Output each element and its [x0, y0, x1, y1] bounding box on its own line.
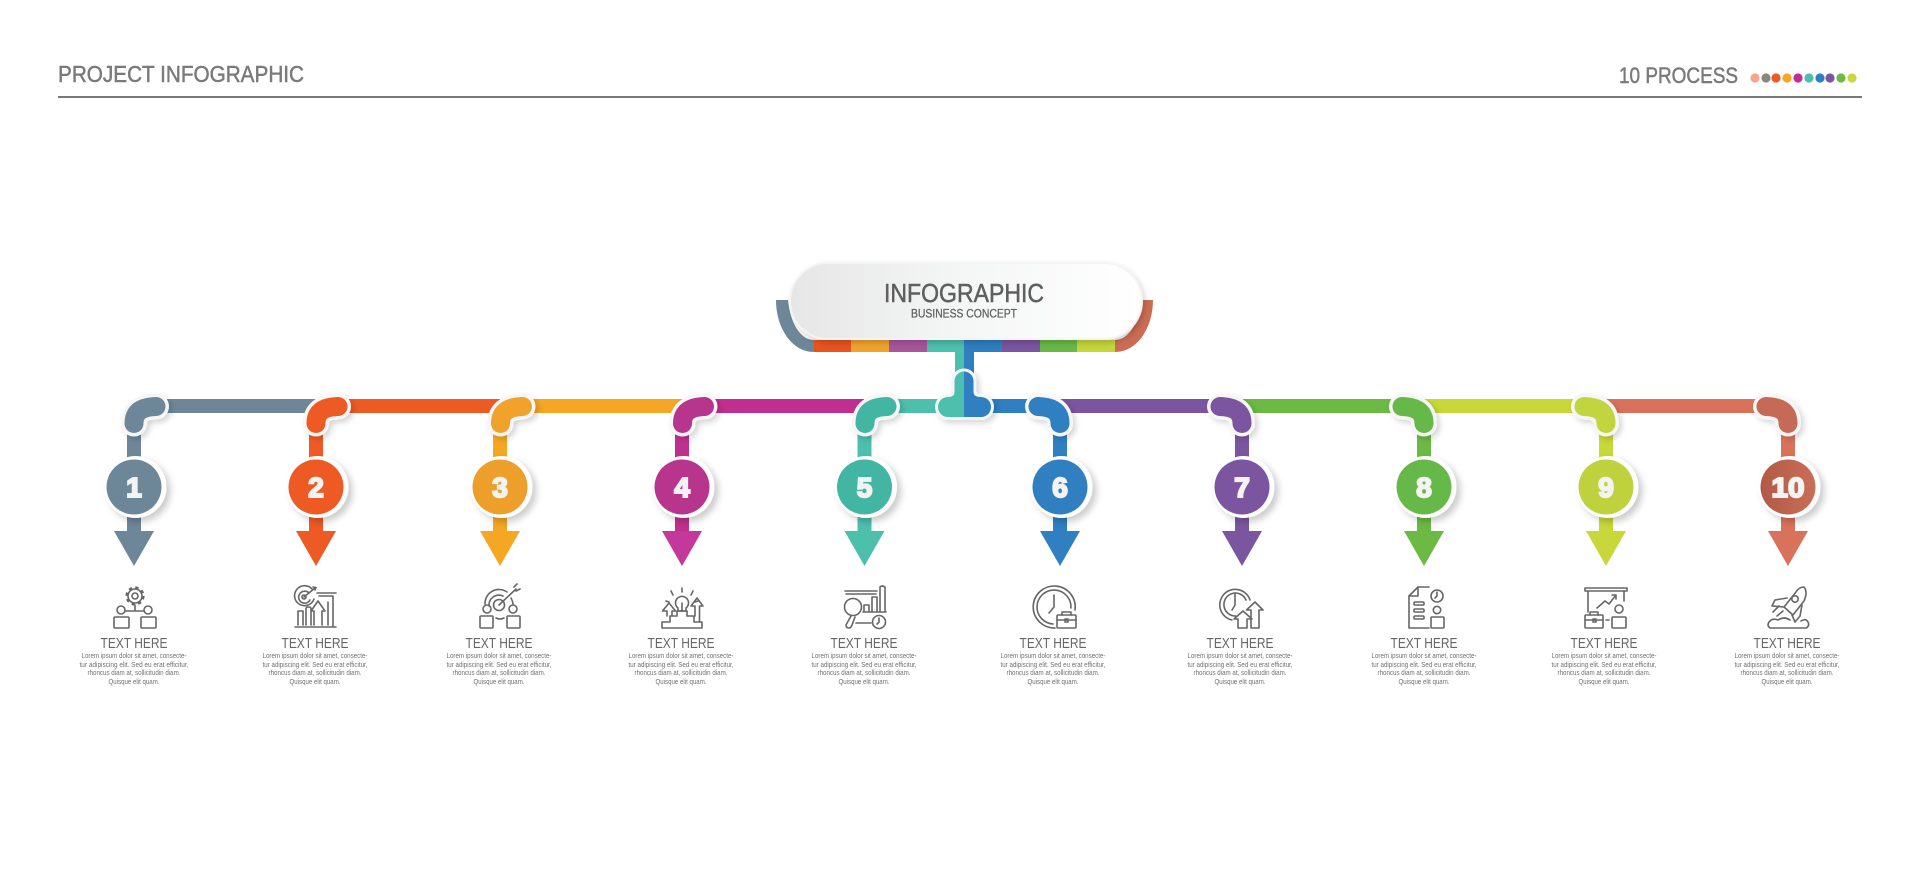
trunk T junction [938, 372, 991, 417]
hub title: INFOGRAPHIC [884, 278, 1044, 308]
step 1 marker: 1 [126, 472, 142, 503]
step 4 marker [652, 406, 714, 566]
icon 1: gear and team [114, 588, 156, 628]
step 5 marker [835, 406, 897, 566]
text block 7: Quisque elit quam. [1214, 679, 1266, 686]
text block 9: tur adipiscing elit. Sed eu erat efficitur, [1552, 662, 1657, 669]
text block 2 [262, 636, 368, 686]
step 7 marker: 7 [1234, 472, 1250, 503]
text block 5: rhoncus diam at, sollicitudin diam. [818, 670, 911, 677]
icon 4: idea, stairs and arrows [662, 588, 703, 628]
text block 3: TEXT HERE [466, 636, 533, 652]
header: 10 process label: 10 PROCESS [1619, 63, 1738, 88]
text block 8: Lorem ipsum dolor sit amet, consecte- [1372, 653, 1477, 660]
text block 5 [812, 636, 917, 686]
text block 6: tur adipiscing elit. Sed eu erat efficitur, [1000, 662, 1106, 669]
icon 9: presentation board [1585, 588, 1627, 628]
text block 9: TEXT HERE [1570, 636, 1638, 652]
step 7 marker [1212, 406, 1274, 566]
text block 8: rhoncus diam at, sollicitudin diam. [1378, 670, 1471, 677]
text block 2: tur adipiscing elit. Sed eu erat efficitur, [262, 662, 368, 669]
text block 6: Quisque elit quam. [1028, 679, 1079, 686]
step 9 marker [1576, 406, 1638, 566]
text block 8 [1372, 636, 1477, 686]
text block 5: Lorem ipsum dolor sit amet, consecte- [812, 653, 917, 660]
text block 8: TEXT HERE [1390, 636, 1458, 652]
text block 1: Lorem ipsum dolor sit amet, consecte- [82, 653, 187, 660]
icon 5: magnifier, charts and clock [844, 586, 886, 628]
text block 7: tur adipiscing elit. Sed eu erat efficitur, [1188, 662, 1293, 669]
text block 5: TEXT HERE [830, 636, 898, 652]
text block 10: rhoncus diam at, sollicitudin diam. [1740, 670, 1834, 677]
step 3 marker: 3 [492, 472, 508, 503]
text block 6: TEXT HERE [1020, 636, 1087, 652]
text block 3: Quisque elit quam. [474, 679, 525, 686]
text block 1: rhoncus diam at, sollicitudin diam. [88, 670, 181, 677]
text block 6: rhoncus diam at, sollicitudin diam. [1006, 670, 1100, 677]
text block 7: rhoncus diam at, sollicitudin diam. [1194, 670, 1287, 677]
icon 3: target and team [480, 584, 520, 628]
text block 3: tur adipiscing elit. Sed eu erat efficitur, [446, 662, 552, 669]
text block 4: tur adipiscing elit. Sed eu erat efficitur, [628, 662, 734, 669]
text block 1: tur adipiscing elit. Sed eu erat efficitur, [80, 662, 189, 669]
text block 2: rhoncus diam at, sollicitudin diam. [268, 670, 362, 677]
text block 2: Quisque elit quam. [290, 679, 341, 686]
text block 4 [628, 636, 734, 686]
colour band under pill [776, 300, 1153, 352]
text block 7 [1188, 636, 1293, 686]
text block 4: Quisque elit quam. [656, 679, 707, 686]
text block 6 [1000, 636, 1106, 686]
text block 10: Quisque elit quam. [1762, 679, 1813, 686]
text block 8: Quisque elit quam. [1398, 679, 1450, 686]
text block 3: Lorem ipsum dolor sit amet, consecte- [446, 653, 552, 660]
text block 5: tur adipiscing elit. Sed eu erat efficitur, [812, 662, 917, 669]
text block 7: TEXT HERE [1206, 636, 1274, 652]
text block 4: rhoncus diam at, sollicitudin diam. [634, 670, 728, 677]
step 10 marker: 10 [1772, 472, 1804, 503]
icon 10: rocket launch [1768, 587, 1809, 628]
text block 9: Lorem ipsum dolor sit amet, consecte- [1552, 653, 1657, 660]
text block 2: TEXT HERE [282, 636, 349, 652]
step 9 marker: 9 [1598, 472, 1614, 503]
text block 10: TEXT HERE [1754, 636, 1821, 652]
step 5 marker: 5 [857, 472, 872, 503]
text block 1: Quisque elit quam. [108, 679, 160, 686]
text block 6: Lorem ipsum dolor sit amet, consecte- [1000, 653, 1106, 660]
text block 8: tur adipiscing elit. Sed eu erat efficitur, [1372, 662, 1477, 669]
text block 4: Lorem ipsum dolor sit amet, consecte- [628, 653, 734, 660]
step 6 marker [1030, 406, 1092, 566]
text block 1 [80, 636, 189, 686]
step 2 marker: 2 [308, 472, 324, 503]
horizontal connector bars [152, 399, 1770, 413]
text block 9: Quisque elit quam. [1578, 679, 1630, 686]
icon 7: clock and rising arrows [1220, 589, 1263, 628]
text block 10: Lorem ipsum dolor sit amet, consecte- [1734, 653, 1840, 660]
step 4 marker: 4 [674, 472, 690, 503]
text block 9 [1552, 636, 1657, 686]
step 6 marker: 6 [1052, 472, 1068, 503]
text block 3: rhoncus diam at, sollicitudin diam. [452, 670, 546, 677]
header: project infographic: PROJECT INFOGRAPHIC [58, 61, 304, 87]
text block 1: TEXT HERE [100, 636, 168, 652]
icon 8: document checklist [1409, 587, 1444, 628]
text block 10 [1734, 636, 1840, 686]
step 1 marker [104, 406, 166, 566]
text block 9: rhoncus diam at, sollicitudin diam. [1558, 670, 1651, 677]
step 2 marker [286, 406, 348, 566]
step 8 marker: 8 [1416, 472, 1432, 503]
pill [790, 263, 1142, 339]
trunk stem [955, 352, 974, 380]
central hub: pill with colour band [776, 263, 1153, 352]
text block 5: Quisque elit quam. [838, 679, 890, 686]
text block 4: TEXT HERE [648, 636, 715, 652]
step 8 marker [1394, 406, 1456, 566]
header: colour dots legend [1750, 73, 1857, 83]
text block 7: Lorem ipsum dolor sit amet, consecte- [1188, 653, 1293, 660]
step 10 marker [1758, 406, 1820, 566]
step 3 marker [470, 406, 532, 566]
text block 10: tur adipiscing elit. Sed eu erat efficitur, [1734, 662, 1840, 669]
text block 3 [446, 636, 552, 686]
text block 2: Lorem ipsum dolor sit amet, consecte- [262, 653, 368, 660]
hub subtitle: BUSINESS CONCEPT [911, 308, 1017, 320]
icon 6: clock and briefcase [1033, 586, 1076, 628]
icon 2: target and growth chart [295, 586, 336, 627]
